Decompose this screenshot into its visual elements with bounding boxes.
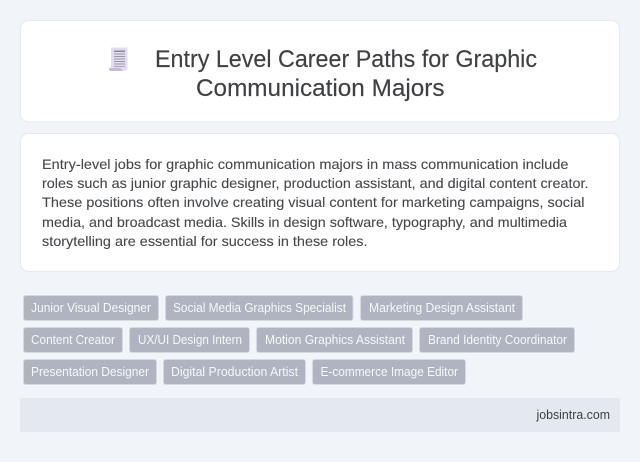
description text <box>42 156 588 249</box>
tag: Presentation Designer <box>24 360 156 384</box>
panel: title header <box>20 20 620 122</box>
tag: Marketing Design Assistant: Marketing Design Assistant <box>369 300 515 315</box>
icon: paper scroll receipt <box>109 48 128 71</box>
tag: Junior Visual Designer <box>24 296 158 320</box>
tag: Social Media Graphics Specialist: Social Media Graphics Specialist <box>173 300 346 315</box>
tags: job titles <box>24 296 574 384</box>
panel: description <box>20 134 620 272</box>
tag: Brand Identity Coordinator <box>420 328 574 352</box>
tag: Content Creator: Content Creator <box>31 332 116 347</box>
tag: Motion Graphics Assistant: Motion Graphics Assistant <box>265 332 405 347</box>
description text: Entry-level jobs for graphic communication majors in mass communication include <box>42 156 569 172</box>
tag: Digital Production Artist: Digital Production Artist <box>171 364 298 379</box>
tag: Junior Visual Designer: Junior Visual Designer <box>31 300 152 315</box>
description text: media, and broadcast media. Skills in design software, typography, and multimedia <box>42 214 567 230</box>
description text: roles such as junior graphic designer, production assistant, and digital content creator. <box>42 175 588 191</box>
description text: These positions often involve creating visual content for marketing campaigns, social <box>42 194 584 210</box>
footer bar <box>20 398 620 432</box>
tag: UX/UI Design Intern: UX/UI Design Intern <box>138 332 242 347</box>
footer source text: jobsintra.com <box>536 408 610 422</box>
title <box>155 46 537 102</box>
description text: storytelling are essential for success in these roles. <box>42 233 368 249</box>
title: Entry Level Career Paths for Graphic <box>155 46 537 73</box>
tag: E-commerce Image Editor: E-commerce Image Editor <box>320 364 459 379</box>
tag: Social Media Graphics Specialist <box>166 296 353 320</box>
tag: Motion Graphics Assistant <box>256 328 412 352</box>
tag: Marketing Design Assistant <box>360 296 522 320</box>
tag: UX/UI Design Intern <box>130 328 250 352</box>
tag: E-commerce Image Editor <box>312 360 466 384</box>
tag: Content Creator <box>24 328 122 352</box>
title: Communication Majors <box>196 75 444 102</box>
tag: Brand Identity Coordinator: Brand Identity Coordinator <box>428 332 568 347</box>
tag: Presentation Designer: Presentation Designer <box>31 364 150 379</box>
tag: Digital Production Artist <box>164 360 306 384</box>
